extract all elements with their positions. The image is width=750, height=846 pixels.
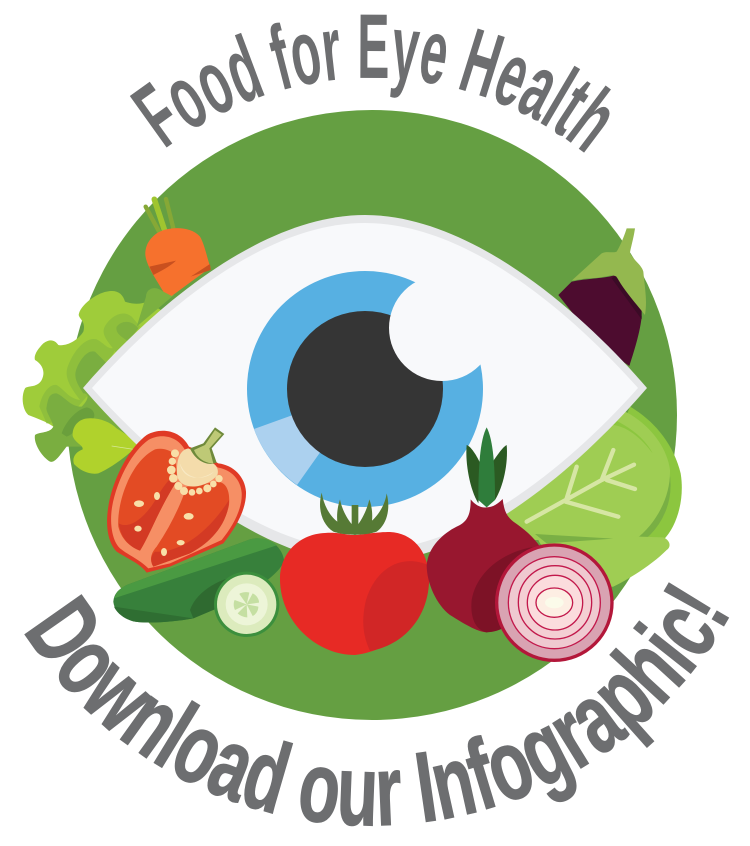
icon: tomato xyxy=(280,493,429,655)
icon: red onion xyxy=(427,427,612,660)
title: Food for Eye Health: Food for Eye Health xyxy=(130,14,611,152)
icon: eggplant xyxy=(558,228,646,366)
eye outline xyxy=(83,215,647,563)
icon: cucumber xyxy=(113,538,284,637)
icon: lettuce xyxy=(23,288,174,474)
eye white xyxy=(92,223,638,551)
call to action: Download our Infographic!: Download our Infographic! xyxy=(24,582,730,826)
icon: bell pepper xyxy=(107,427,246,573)
iris light wedge xyxy=(254,389,365,485)
icon: carrot xyxy=(145,199,211,296)
icon: cabbage xyxy=(500,407,682,600)
green circle background xyxy=(67,110,677,720)
iris xyxy=(247,271,483,507)
eye highlight xyxy=(389,275,495,381)
pupil xyxy=(287,311,443,467)
